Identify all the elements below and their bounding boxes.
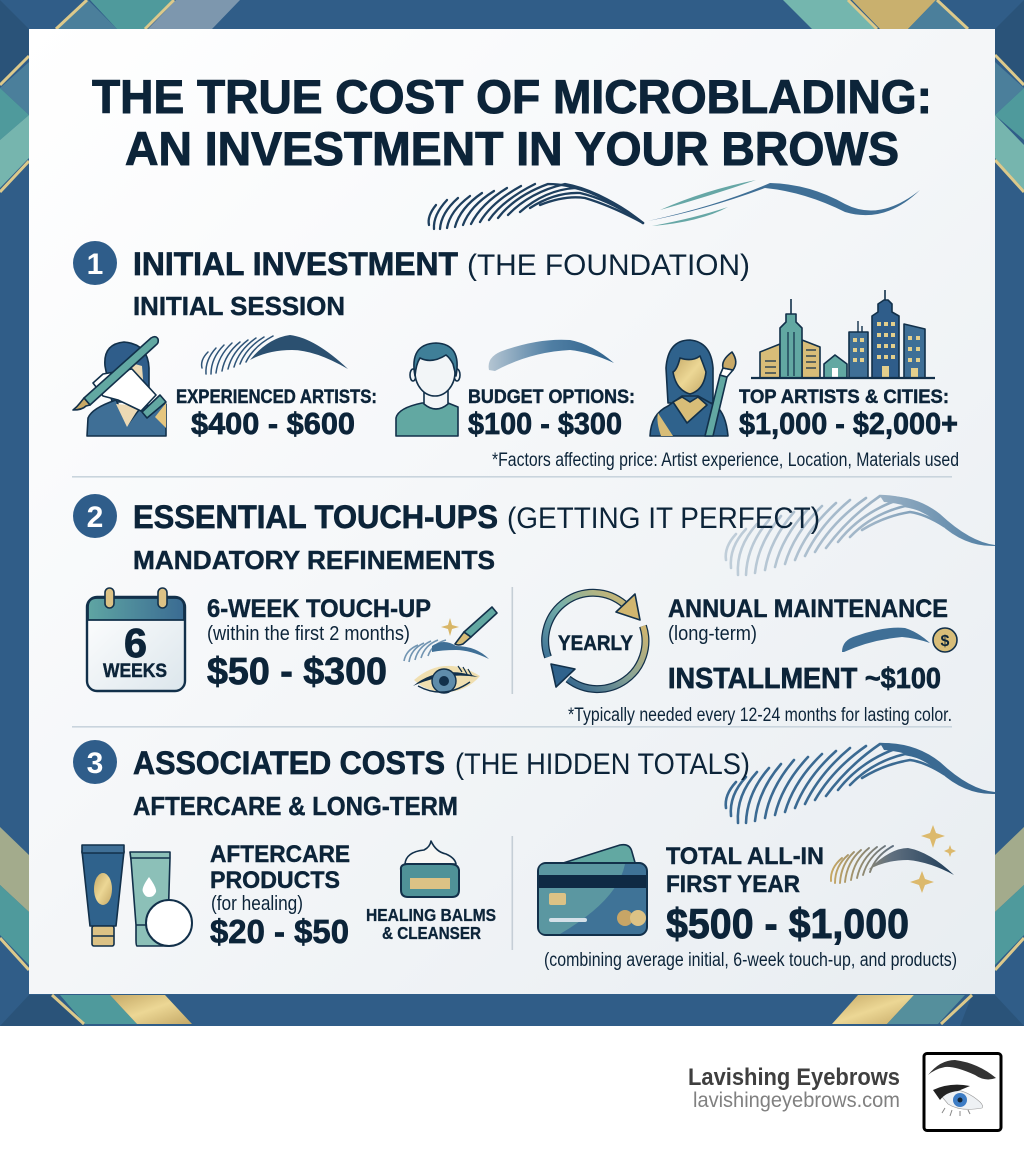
label: budget options: $100 - $300 [468, 406, 622, 441]
label: top artists and cities: TOP ARTISTS & CITIES: [739, 387, 949, 408]
icon: aftercare tubes and pad [82, 845, 192, 946]
icon: eye with brow and pen [404, 607, 497, 693]
icon: brow with coin: $ [941, 633, 950, 650]
label: aftercare products [210, 841, 350, 950]
label: experienced artists [176, 387, 377, 441]
section 1 heading: INITIAL INVESTMENT [133, 246, 458, 282]
icon: city skyline [751, 290, 935, 378]
section 2 badge [73, 494, 117, 538]
brand name: Lavishing Eyebrows [688, 1064, 900, 1091]
logo: eye and brow [924, 1054, 1001, 1130]
section 1 badge: 1 [87, 248, 103, 281]
label: aftercare products: AFTERCARE [210, 841, 350, 868]
label: 6-week touch-up [207, 595, 431, 693]
brand name: lavishingeyebrows.com [693, 1089, 900, 1112]
label: annual maintenance: INSTALLMENT ~$100 [668, 663, 941, 695]
label: top artists and cities: $1,000 - $2,000+ [739, 406, 958, 441]
icon: brow with coin [842, 628, 957, 652]
label: budget options: BUDGET OPTIONS: [468, 387, 635, 408]
section 2 subheading: MANDATORY REFINEMENTS [133, 545, 495, 575]
label: healing balms: HEALING BALMS [366, 905, 496, 925]
section 3 badge: 3 [87, 747, 103, 780]
decorative brow section 3 [726, 743, 995, 823]
label: annual maintenance [668, 595, 948, 695]
label: top artists and cities [739, 387, 958, 441]
section 2 heading [133, 499, 820, 535]
title: THE TRUE COST OF MICROBLADING: [92, 70, 932, 123]
content panel [29, 29, 995, 994]
icon: calendar 6 weeks: 6 [124, 620, 147, 666]
footnote: total explanation: (combining average initial, 6-week touch-up, and products) [544, 950, 957, 971]
label: 6-week touch-up: $50 - $300 [207, 651, 387, 693]
section 3 heading: (THE HIDDEN TOTALS) [455, 748, 750, 781]
footnote: touch-up frequency: *Typically needed every 12-24 months for lasting color. [568, 705, 952, 726]
icon: yearly cycle [545, 593, 645, 689]
label: experienced artists: EXPERIENCED ARTISTS: [176, 387, 377, 408]
icon: woman with paintbrush [650, 340, 736, 436]
section 1 subheading: INITIAL SESSION [133, 291, 345, 321]
decorative brow section 2 [726, 496, 995, 575]
icon: cream jar [401, 841, 459, 897]
label: aftercare products: $20 - $50 [210, 913, 349, 950]
section 2 heading: ESSENTIAL TOUCH-UPS [133, 499, 498, 535]
label: experienced artists: $400 - $600 [191, 406, 355, 441]
label: annual maintenance: ANNUAL MAINTENANCE [668, 595, 948, 623]
icon: artist with pen [73, 337, 166, 436]
brand name [688, 1064, 900, 1112]
label: healing balms [366, 905, 496, 943]
label: 6-week touch-up: 6-WEEK TOUCH-UP [207, 595, 431, 623]
icon: young person [396, 343, 460, 436]
icon: calendar 6 weeks: WEEKS [103, 661, 167, 682]
label: aftercare products: PRODUCTS [210, 867, 340, 894]
section 1 heading [133, 246, 750, 282]
section 1 badge [73, 241, 117, 285]
icon: golden brow with sparkles [831, 825, 956, 893]
icon: soft brow [489, 340, 614, 371]
section 3 subheading: AFTERCARE & LONG-TERM [133, 791, 458, 821]
icon: calendar 6 weeks [87, 588, 185, 691]
label: 6-week touch-up: (within the first 2 months) [207, 623, 410, 645]
icon: credit cards [538, 845, 647, 935]
section 3 badge [73, 740, 117, 784]
decorative brow under title [429, 180, 920, 229]
label: healing balms: & CLEANSER [382, 923, 481, 943]
title [92, 70, 932, 175]
label: budget options [468, 387, 635, 441]
label: total first year: FIRST YEAR [666, 871, 800, 898]
section 1 heading: (THE FOUNDATION) [467, 249, 750, 282]
label: total first year [666, 843, 909, 947]
section 3 heading [133, 745, 750, 781]
icon: detailed brow [202, 335, 348, 374]
section 2 badge: 2 [87, 501, 103, 534]
section 2 heading: (GETTING IT PERFECT) [507, 502, 820, 535]
label: total first year: $500 - $1,000 [666, 900, 909, 947]
label: annual maintenance: (long-term) [668, 623, 757, 645]
icon: yearly cycle: YEARLY [558, 632, 633, 655]
label: aftercare products: (for healing) [211, 893, 303, 915]
section 3 heading: ASSOCIATED COSTS [133, 745, 445, 781]
label: total first year: TOTAL ALL-IN [666, 843, 824, 870]
title: AN INVESTMENT IN YOUR BROWS [125, 122, 899, 175]
